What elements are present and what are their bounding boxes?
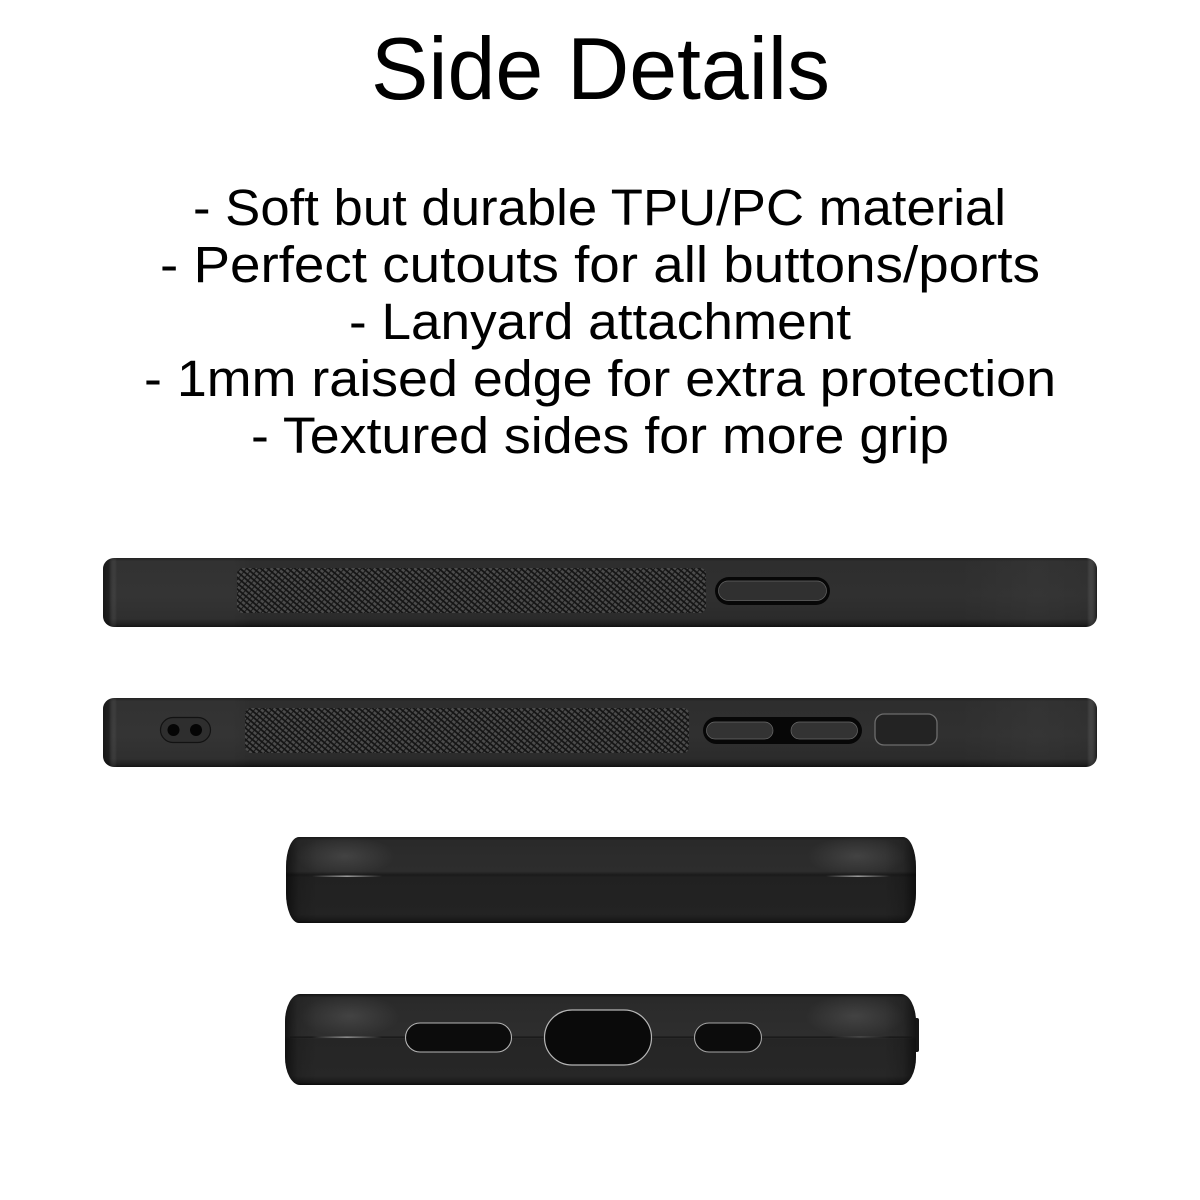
volume buttons cutout: [703, 717, 862, 744]
feature: textured sides: - Textured sides for more grip: [251, 407, 949, 464]
mute switch cutout: [875, 714, 937, 745]
phone case side view 1: [103, 558, 1097, 627]
side button bump: [912, 1018, 919, 1052]
title: Side Details: [371, 19, 830, 118]
textured grip strip: [245, 708, 689, 753]
feature: raised edge: - 1mm raised edge for extra protection: [144, 350, 1056, 407]
lanyard attachment holes: [160, 718, 210, 742]
speaker cutout: [406, 1023, 512, 1052]
feature: cutouts: - Perfect cutouts for all buttons/ports: [160, 236, 1040, 293]
phone case side view 2: [103, 698, 1097, 767]
phone case top view: [286, 836, 916, 923]
feature list: [144, 179, 1056, 464]
feature: lanyard: - Lanyard attachment: [349, 293, 851, 350]
feature: material: - Soft but durable TPU/PC material: [193, 179, 1006, 236]
microphone cutout: [694, 1023, 762, 1052]
phone case bottom view: [285, 994, 919, 1085]
power button cutout: [715, 577, 830, 605]
charging port cutout: [544, 1010, 652, 1065]
textured grip strip: [237, 568, 706, 613]
